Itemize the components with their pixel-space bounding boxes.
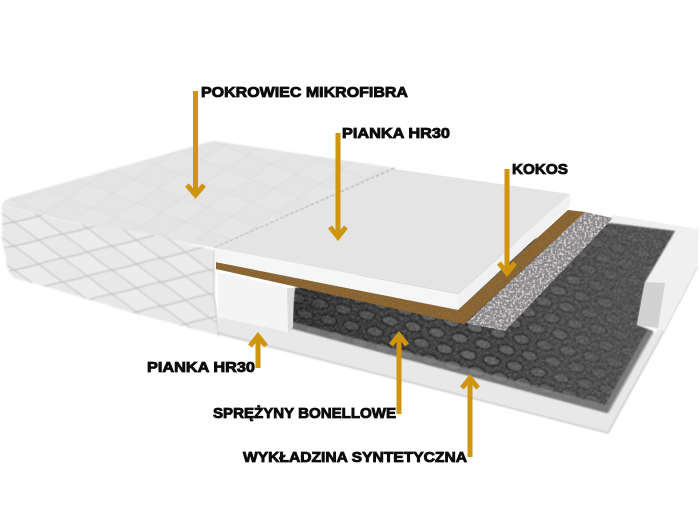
white foam slab bbox=[215, 169, 570, 310]
arrow: top foam bbox=[330, 133, 346, 238]
mattress cover: quilted top surface bbox=[2, 141, 395, 248]
arrow: cover bbox=[187, 91, 204, 196]
felt layer bbox=[466, 212, 613, 331]
label: cover: POKROWIEC MIKROFIBRA bbox=[201, 84, 408, 101]
mattress cover: quilted front side bbox=[2, 205, 220, 336]
mattress illustration bbox=[2, 141, 698, 433]
coconut coir layer bbox=[216, 210, 585, 324]
label: bottom foam: PIANKA HR30 bbox=[147, 359, 255, 376]
left white foam block bbox=[218, 272, 294, 332]
rear white foam rail bbox=[610, 215, 698, 331]
arrow: springs bbox=[391, 334, 407, 414]
right foam end block bbox=[637, 282, 665, 328]
label: springs: SPRĘŻYNY BONELLOWE bbox=[213, 405, 396, 422]
label: coconut: KOKOS bbox=[512, 161, 568, 178]
spring layer: bonnell coils bbox=[290, 223, 675, 413]
arrow: synthetic layer bbox=[462, 377, 478, 457]
arrow: bottom foam bbox=[250, 335, 266, 368]
label: top foam: PIANKA HR30 bbox=[342, 125, 450, 142]
bottom synthetic layer: white base board bbox=[218, 232, 698, 433]
label: synthetic layer: WYKŁADZINA SYNTETYCZNA bbox=[243, 449, 467, 466]
arrow: coconut bbox=[499, 169, 515, 274]
